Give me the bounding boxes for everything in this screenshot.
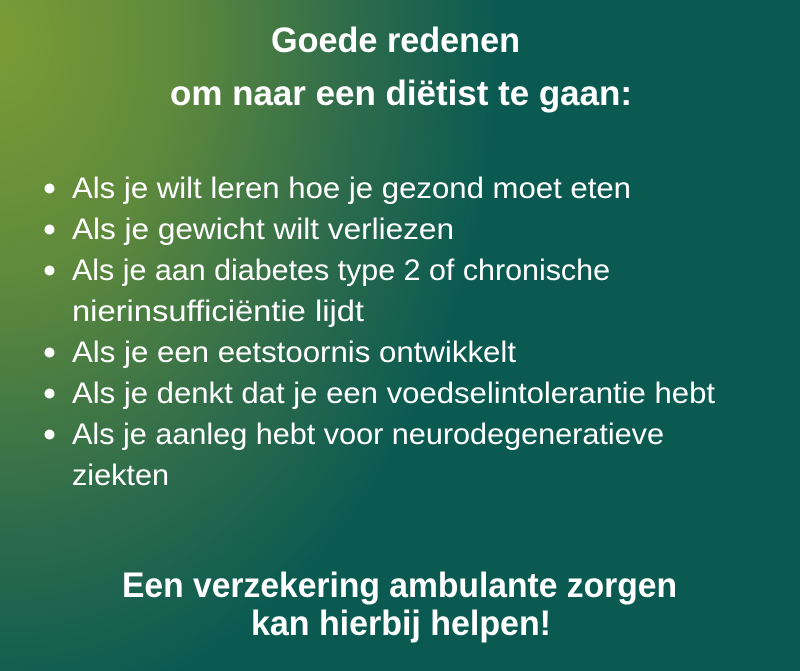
bullet item: neurodegeneratieve ziekten xyxy=(44,418,664,492)
bullet item: eetstoornis: Als je een eetstoornis ontwikkelt xyxy=(72,336,517,369)
bullet item: voedselintolerantie: Als je denkt dat je een voedselintolerantie hebt xyxy=(72,377,716,410)
closing statement xyxy=(122,566,677,643)
closing statement: kan hierbij helpen! xyxy=(251,604,551,643)
closing statement: Een verzekering ambulante zorgen xyxy=(122,566,677,605)
bullet item: neurodegeneratieve ziekten: ziekten xyxy=(72,459,169,492)
title: om naar een diëtist te gaan: xyxy=(170,74,632,113)
title: Goede redenen xyxy=(271,21,520,60)
bullet item: gewicht verliezen: Als je gewicht wilt verliezen xyxy=(72,213,454,246)
bullet item: neurodegeneratieve ziekten: Als je aanleg hebt voor neurodegeneratieve xyxy=(72,418,664,451)
bullet item: diabetes en nierinsufficiëntie: Als je aan diabetes type 2 of chronische xyxy=(72,254,610,287)
bullet item: diabetes en nierinsufficiëntie: nierinsufficiëntie lijdt xyxy=(72,295,365,328)
bullet item: diabetes en nierinsufficiëntie xyxy=(44,254,610,328)
bullet list of reasons xyxy=(44,172,716,492)
bullet item: gezond eten: Als je wilt leren hoe je gezond moet eten xyxy=(72,172,631,205)
title xyxy=(170,21,632,113)
